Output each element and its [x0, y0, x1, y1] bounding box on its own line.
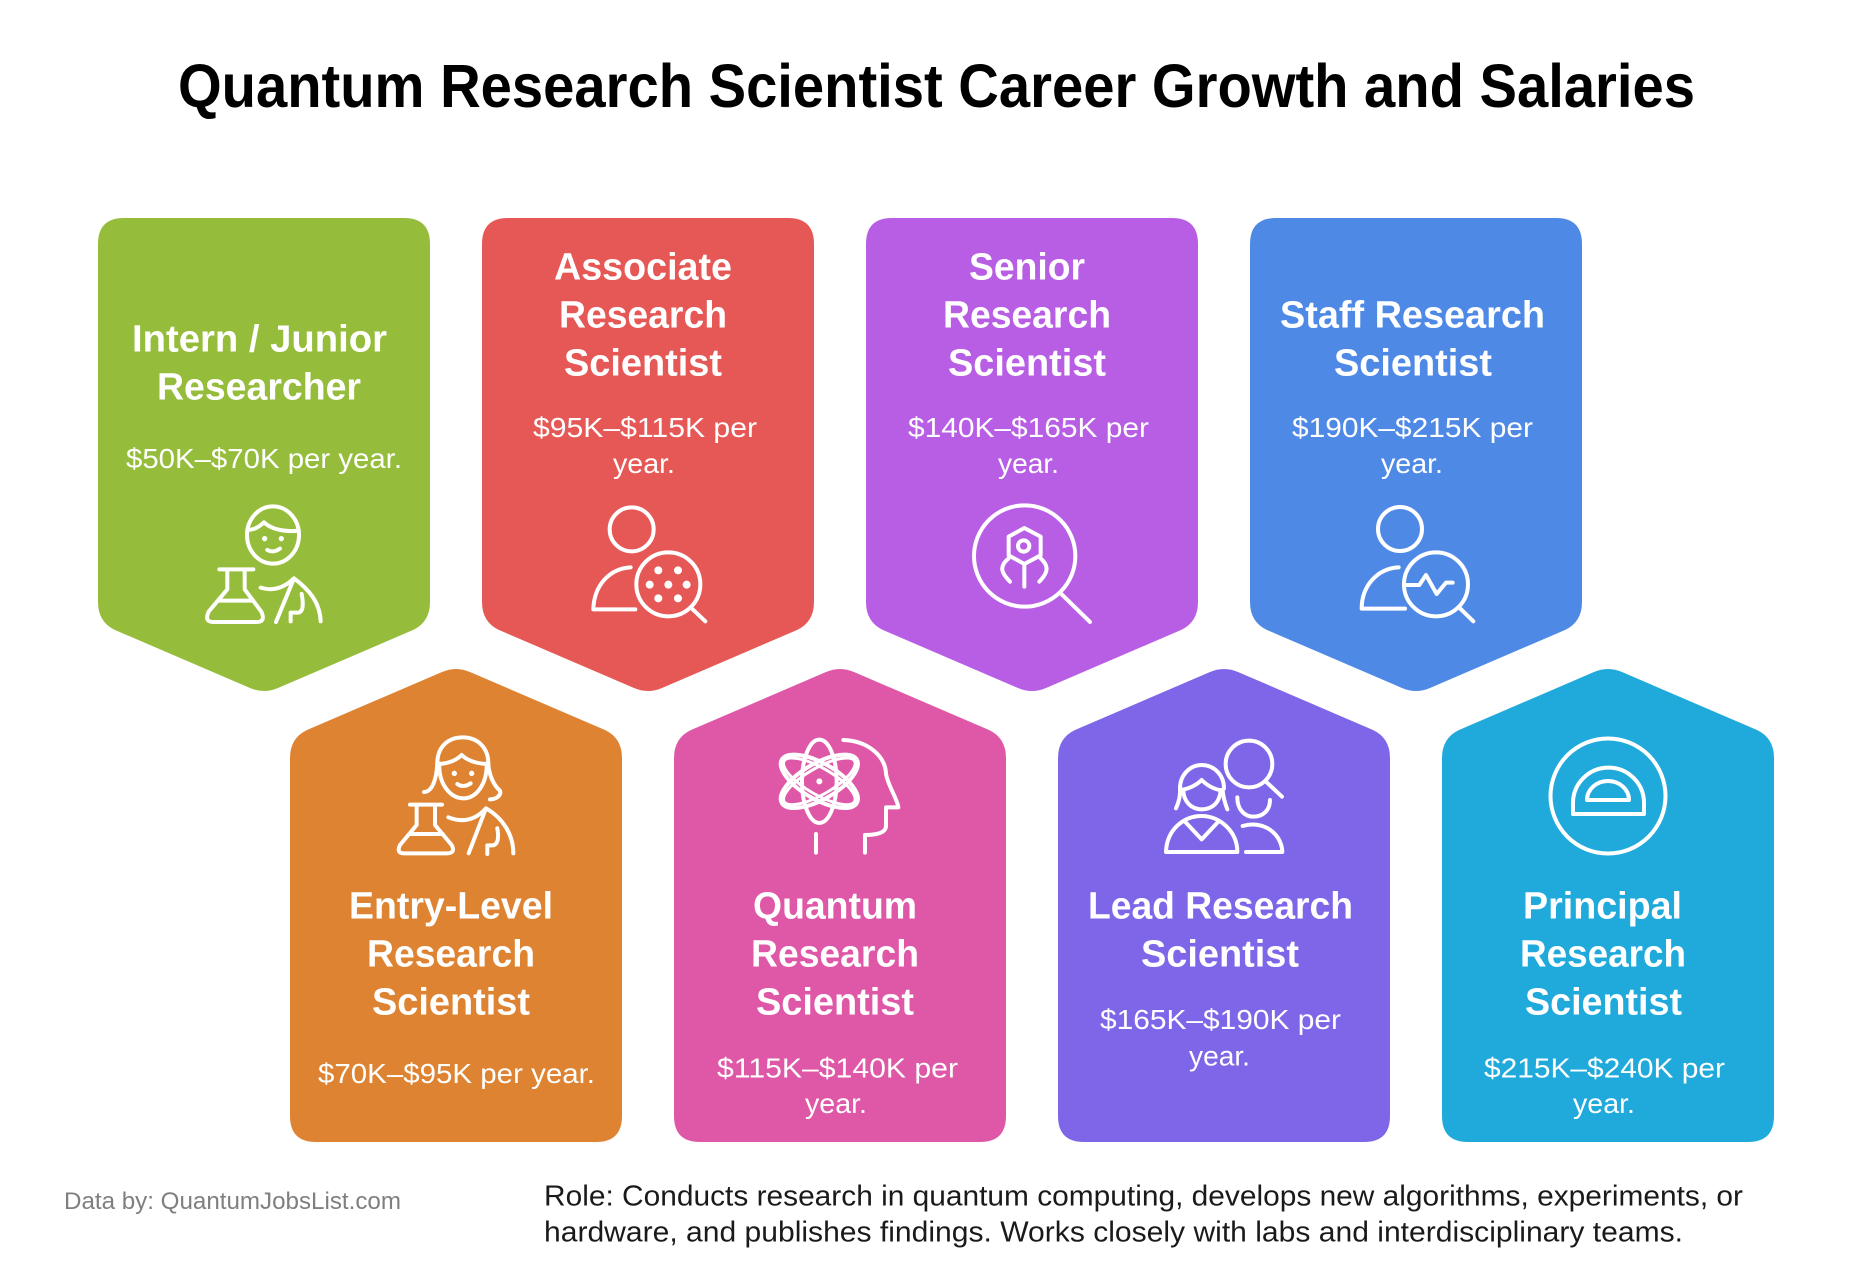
heading: Research: [367, 934, 535, 976]
heading: Principal: [1523, 886, 1682, 928]
salary: year.: [1189, 1040, 1250, 1072]
salary: $165K–$190K per: [1100, 1004, 1341, 1035]
heading: Staff Research: [1280, 294, 1545, 336]
heading: Scientist: [1525, 982, 1682, 1024]
icon: head with atom: [773, 740, 898, 853]
panel: Quantum Research Scientist: [674, 669, 1006, 1142]
salary: [908, 412, 1149, 479]
panel: Senior Research Scientist: [866, 218, 1198, 691]
card shape: [98, 218, 430, 691]
heading: Scientist: [564, 342, 722, 384]
role description: Role: Conducts research in quantum computing, develops new algorithms, experiments, or: [544, 1180, 1744, 1212]
heading: Scientist: [372, 982, 530, 1024]
title: Quantum Research Scientist Career Growth and Salaries: [178, 52, 1695, 120]
icon: magnifier over nanobot: [974, 505, 1090, 622]
salary: [717, 1052, 958, 1119]
salary: [1292, 412, 1533, 479]
salary: year.: [1573, 1088, 1635, 1119]
card shape: [1442, 669, 1774, 1142]
heading: Associate: [554, 246, 732, 288]
panel: Staff Research Scientist: [1250, 218, 1582, 691]
heading: Research: [943, 294, 1111, 336]
heading: [1088, 886, 1353, 976]
salary: year.: [805, 1088, 867, 1119]
heading: Intern / Junior: [132, 318, 387, 360]
salary: [1484, 1052, 1725, 1119]
salary: $140K–$165K per: [908, 412, 1149, 443]
salary: year.: [998, 448, 1059, 479]
data source note: Data by: QuantumJobsList.com: [64, 1188, 401, 1215]
salary: $70K–$95K per year.: [318, 1058, 595, 1089]
icon: person with magnifier over particles: [593, 507, 705, 621]
heading: Research: [751, 934, 919, 976]
panel: Associate Research Scientist: [482, 218, 814, 691]
heading: Scientist: [1141, 934, 1299, 976]
card shape: [866, 218, 1198, 691]
card shape: [1250, 218, 1582, 691]
heading: [349, 886, 553, 1024]
heading: [554, 246, 732, 384]
salary: $50K–$70K per year.: [126, 443, 402, 474]
card shape: [290, 669, 622, 1142]
heading: Lead Research: [1088, 886, 1353, 928]
panel: Entry-Level Research Scientist: [290, 669, 622, 1142]
icon: junior researcher with flask: [207, 506, 321, 622]
heading: [132, 318, 387, 408]
card shape: [674, 669, 1006, 1142]
heading: Quantum: [753, 886, 917, 928]
heading: [943, 246, 1111, 384]
heading: Scientist: [756, 982, 914, 1024]
card shape: [1058, 669, 1390, 1142]
heading: Research: [1520, 934, 1686, 976]
salary: year.: [613, 448, 675, 479]
salary: [1100, 1004, 1341, 1072]
salary: $190K–$215K per: [1292, 412, 1533, 443]
role description: [544, 1180, 1744, 1248]
salary: [533, 412, 757, 479]
heading: [1520, 886, 1686, 1024]
panel: Lead Research Scientist: [1058, 669, 1390, 1142]
heading: Scientist: [1334, 342, 1492, 384]
panel: Principal Research Scientist: [1442, 669, 1774, 1142]
salary: $215K–$240K per: [1484, 1052, 1725, 1084]
heading: [751, 886, 919, 1024]
heading: [1280, 294, 1545, 384]
icon: research team with magnifier: [1166, 741, 1282, 852]
panel: Intern / Junior Researcher: [98, 218, 430, 691]
salary: $95K–$115K per: [533, 412, 757, 443]
salary: year.: [1381, 448, 1443, 479]
icon: person with magnifier over pulse: [1362, 507, 1473, 621]
salary: $115K–$140K per: [717, 1052, 958, 1084]
heading: Entry-Level: [349, 886, 553, 928]
heading: Scientist: [948, 342, 1106, 384]
heading: Senior: [969, 246, 1085, 288]
heading: Research: [559, 294, 727, 336]
card shape: [482, 218, 814, 691]
icon: female scientist with flask: [399, 737, 513, 854]
icon: protractor in circle: [1550, 738, 1666, 854]
heading: Researcher: [157, 366, 361, 408]
role description: hardware, and publishes findings. Works closely with labs and interdisciplinary teams.: [544, 1216, 1683, 1248]
